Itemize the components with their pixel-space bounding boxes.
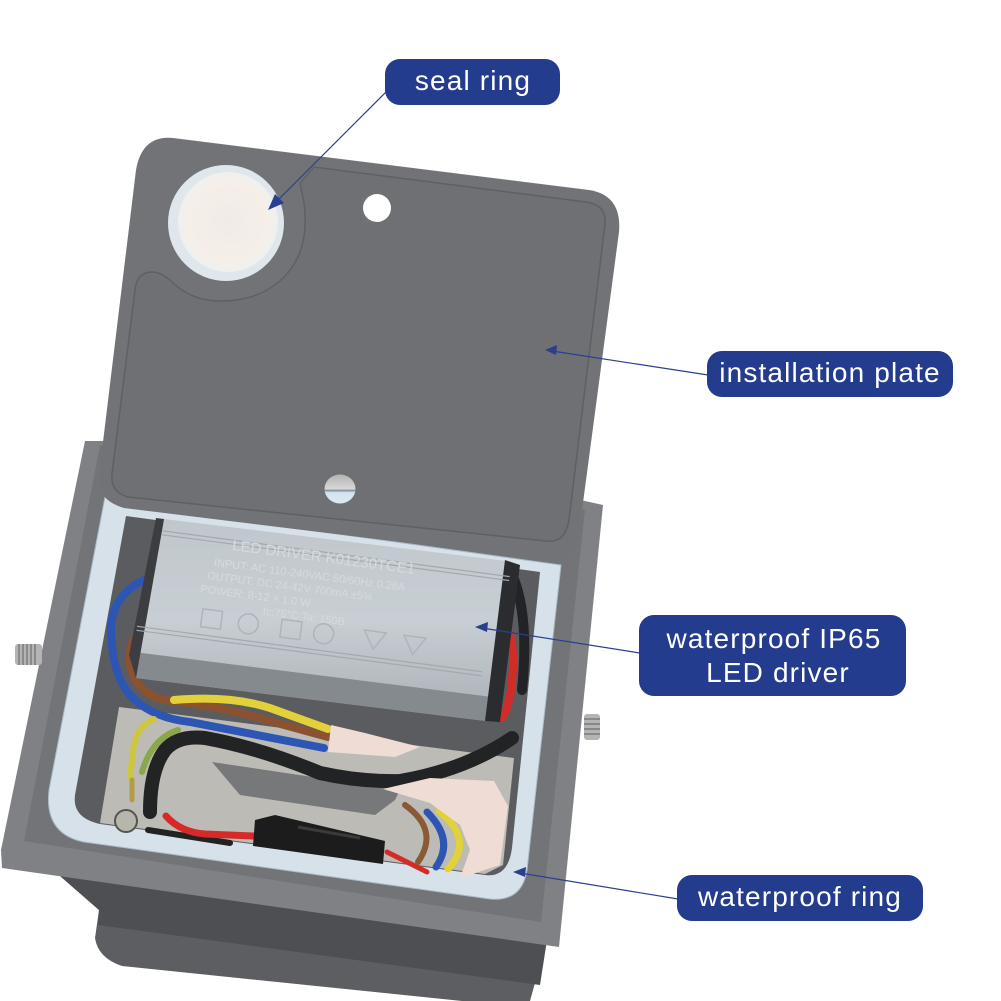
mounting screw right [584,714,600,740]
callout: installation plate [545,345,953,397]
lower housing body [60,876,547,1001]
black cable behind driver [510,570,524,690]
driver label printing: POWER: 8-12 × 1.0 W [200,583,312,610]
housing flange [1,441,603,947]
callout: seal ring: seal ring [415,65,531,96]
interior metal floor [100,707,514,874]
driver label printing: OUTPUT: DC 24-42V 700mA ±5% [206,570,374,604]
seal ring [168,165,284,281]
installation plate [99,138,619,560]
wiring [111,570,524,872]
blue wire [111,579,324,748]
driver label printing [136,526,510,678]
callout: installation plate: installation plate [719,357,941,388]
driver label printing: LED DRIVER K01230TCE1 [231,537,416,578]
black braided sleeve [150,738,512,812]
earth lug [130,780,134,800]
lower screw hole [324,474,356,504]
black connector [253,815,385,864]
mounting screw left [15,644,42,665]
upper screw hole [363,194,391,222]
plate recessed panel [112,167,605,541]
earth screw [115,810,137,832]
green-yellow earth wires [130,719,154,778]
callout: seal ring [268,59,560,210]
callout: waterproof ring [513,867,923,921]
yellow wire [174,699,328,729]
driver label printing: INPUT: AC 110-240VAC 50/60Hz 0.28A [213,557,407,594]
output wires [405,805,426,862]
heat shrink wrap [328,725,508,878]
callout: waterproof IP65 LED driver: waterproof IP65 [666,623,881,654]
brown wire [129,637,328,737]
waterproof ring gasket [48,497,561,899]
callout: waterproof ring: waterproof ring [697,881,902,912]
black wire [148,830,230,843]
interior cavity [75,516,540,875]
LED driver [129,518,520,722]
red wires [166,816,253,836]
callout: waterproof IP65 LED driver [475,615,906,696]
callout: waterproof IP65 LED driver: LED driver [706,657,850,688]
driver label printing: tc:75°C Ta: 150B [262,606,346,628]
